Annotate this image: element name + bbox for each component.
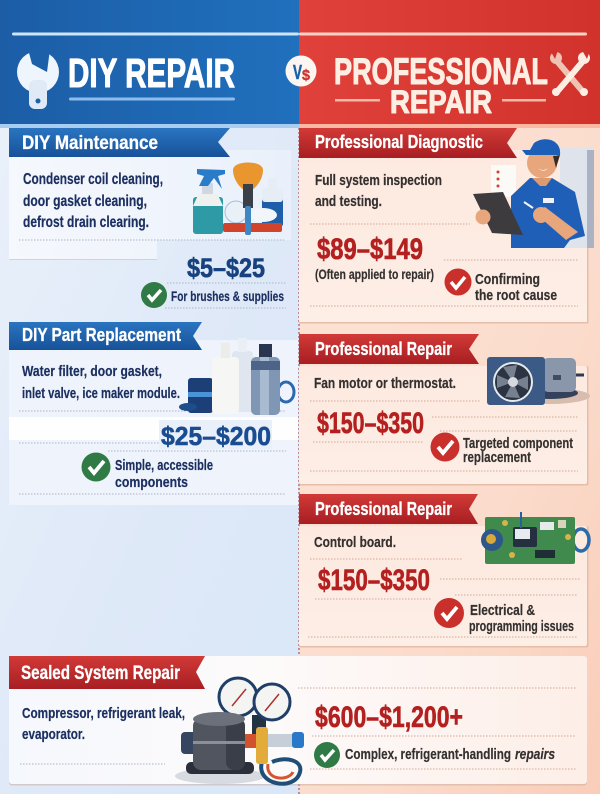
panel: Sealed System Repair [9,656,587,786]
panel: DIY Maintenance [9,128,291,308]
description text [315,172,442,210]
price: $89–$149: $89–$149 [317,233,423,266]
description text: Compressor, refrigerant leak, [22,705,185,722]
note: simple components: components [115,475,188,491]
heading ribbon: Sealed System Repair: Sealed System Repair [21,663,180,684]
heading ribbon: Professional Repair [299,494,478,524]
note: root cause: Confirming [475,271,540,288]
heading ribbon: DIY Maintenance [9,128,230,157]
background: professional side [299,124,600,794]
description text: Control board. [314,534,396,551]
VS badge [286,56,316,86]
note: electrical issues: Electrical & [470,603,535,619]
heading ribbon: DIY Part Replacement [9,322,202,350]
note: simple components: Simple, accessible [115,458,213,474]
heading ribbon: DIY Part Replacement: DIY Part Replacement [22,324,181,345]
panel: DIY Part Replacement [9,322,298,505]
description text: Water filter, door gasket, [22,363,162,380]
price: $150–$350: $150–$350 [318,564,430,597]
check icon [444,268,472,296]
icon: fan motor [487,357,590,405]
icon: wrench [17,49,59,109]
description text [22,705,185,743]
note: root cause: the root cause [475,287,557,304]
note: root cause [475,271,557,304]
price: $5–$25: $5–$25 [187,253,265,283]
heading ribbon: Professional Repair [299,334,479,364]
icon: cleaning supplies [193,162,283,235]
note: brushes and supplies: For brushes & supplies [171,288,284,304]
title: DIY Repair: DIY REPAIR [68,50,235,96]
panel: Professional Diagnostic [299,128,594,324]
check icon [82,452,110,482]
price: $600–$1,200+: $600–$1,200+ [315,701,463,734]
heading ribbon: Professional Repair: Professional Repair [315,339,452,359]
description text: Condenser coil cleaning, [23,171,163,188]
note: targeted replacement [463,436,573,466]
icon: replacement parts [179,338,294,415]
check icon [141,282,167,308]
heading ribbon: DIY Maintenance: DIY Maintenance [22,133,158,154]
header banner [0,0,600,128]
note: electrical issues [469,603,574,635]
note: complex repairs: Complex, refrigerant-handling [345,747,511,763]
icon: compressor and gauges [175,678,304,784]
note: targeted replacement: replacement [463,450,531,466]
price note: (Often applied to repair) [315,267,434,282]
description text [22,363,180,402]
heading ribbon: Professional Diagnostic [299,128,517,158]
price: $25–$200: $25–$200 [161,421,271,451]
description text: door gasket cleaning, [23,193,147,210]
illustration: technician [473,139,594,248]
check icon [314,742,340,768]
panel: Professional Repair, control board [299,494,589,648]
icon: control board [481,512,589,564]
VS badge: V [293,62,302,84]
panel: Professional Repair, fan motor [299,334,590,486]
title: Repair: REPAIR [390,84,492,120]
icon: crossed tools [550,50,590,96]
center divider [298,128,300,794]
description text: Full system inspection [315,172,442,189]
check icon [434,598,464,628]
VS badge: $ [302,67,311,84]
description text: inlet valve, ice maker module. [22,385,180,402]
note: simple components [115,458,213,491]
heading ribbon: Professional Diagnostic: Professional Diagnostic [315,132,483,152]
check icon [430,432,460,462]
price: $150–$350: $150–$350 [317,407,424,440]
description text: and testing. [315,193,382,210]
heading ribbon: Sealed System Repair [9,656,205,689]
note: complex repairs: repairs [515,747,555,763]
background: DIY side [0,124,299,794]
heading ribbon: Professional Repair: Professional Repair [315,499,452,519]
description text: defrost drain clearing. [23,214,149,231]
description text: evaporator. [22,726,85,743]
description text: Fan motor or thermostat. [314,375,456,392]
description text [23,171,163,231]
